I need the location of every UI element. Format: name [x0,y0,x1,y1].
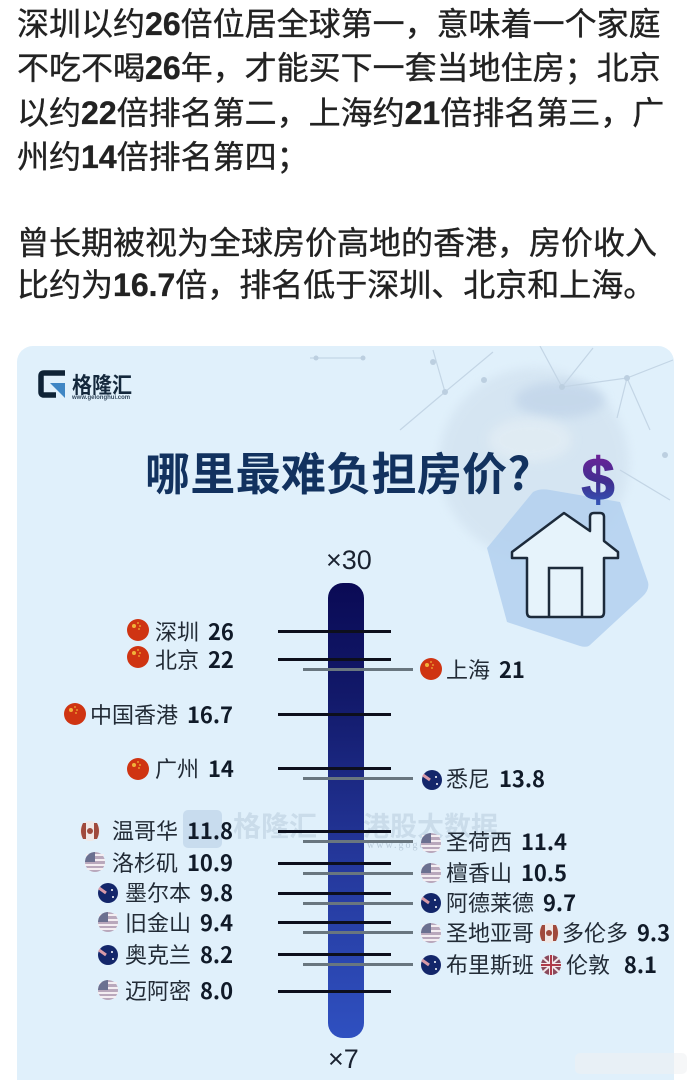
title: 哪里最难负担房价? [145,438,531,503]
scale bar [328,583,364,1038]
label: bottom of scale: ×7 [328,1044,359,1074]
panel: infographic card [17,346,674,1080]
label: Beijing: 北京 22 [155,643,234,675]
label: top of scale: ×30 [326,545,372,575]
intro paragraph: 曾长期被视为全球房价高地的香港，房价收入 [17,218,657,264]
flag: Honolulu [421,863,441,883]
watermark: logo and name [183,805,498,851]
watermark: logo and name: www.gogo [367,840,427,851]
label: Auckland: 奥克兰 8.2 [125,938,233,970]
watermark: logo and name: 港股大数据 [363,805,498,844]
background globe network [310,346,673,542]
flag: Miami [98,980,118,1000]
flag: Toronto [539,923,559,943]
intro paragraph: 深圳以约26倍位居全球第一，意味着一个家庭 [17,0,661,45]
icon: dollar sign: $ [581,446,615,513]
intro paragraph [17,0,664,306]
label: Melbourne: 墨尔本 9.8 [125,876,233,908]
hexagon backdrop [487,490,648,647]
label: Sydney: 悉尼 13.8 [446,762,545,794]
logo: Gelonghui [38,368,132,401]
watermark: logo and name: 格隆汇 [233,805,317,845]
label: Toronto: 多伦多 9.3 [562,916,670,948]
flag: Guangzhou [127,758,149,780]
flag: Brisbane [420,954,442,976]
flag: Auckland [98,945,118,965]
icon: house [510,512,620,618]
flag: Los Angeles [85,852,105,872]
label: Los Angeles: 洛杉矶 10.9 [112,846,233,878]
flag: Hong Kong [64,703,86,725]
flag: Shenzhen [127,619,149,641]
intro paragraph: 州约14倍排名第四； [17,132,309,178]
label: San Diego: 圣地亚哥 [446,916,534,948]
intro paragraph: 比约为16.7倍，排名低于深圳、北京和上海。 [17,260,655,306]
label: Vancouver: 温哥华 11.8 [112,814,233,846]
flag: San Diego [421,923,441,943]
label: Adelaide: 阿德莱德 9.7 [446,886,576,918]
intro paragraph: 不吃不喝26年，才能买下一套当地住房；北京 [17,43,661,89]
flag: Adelaide [421,893,441,913]
flag: London [540,954,562,976]
label: Miami: 迈阿密 8.0 [125,974,233,1006]
label: Hong Kong: 中国香港 16.7 [90,698,233,730]
label: Guangzhou: 广州 14 [155,752,234,784]
label: Shanghai: 上海 21 [446,653,525,685]
label: London: 伦敦 8.1 [566,948,657,980]
label: San Francisco: 旧金山 9.4 [125,906,233,938]
flag: Shanghai [420,658,442,680]
flag: San Jose [421,833,441,853]
label: Honolulu: 檀香山 10.5 [446,856,567,888]
label: Brisbane: 布里斯班 [446,948,534,980]
flag: Vancouver [80,821,100,841]
label: San Jose: 圣荷西 11.4 [446,825,567,857]
flag: Beijing [127,646,149,668]
logo: Gelonghui: www.gelonghui.com [72,395,130,401]
label: Shenzhen: 深圳 26 [155,615,234,647]
flag: Melbourne [98,883,118,903]
logo: Gelonghui: 格隆汇 [72,368,132,400]
intro paragraph: 以约22倍排名第二，上海约21倍排名第三，广 [17,88,664,134]
watermark: corner stamp [575,1053,687,1074]
flag: Sydney [422,770,442,790]
flag: San Francisco [98,912,118,932]
scale tick marks [278,630,413,993]
